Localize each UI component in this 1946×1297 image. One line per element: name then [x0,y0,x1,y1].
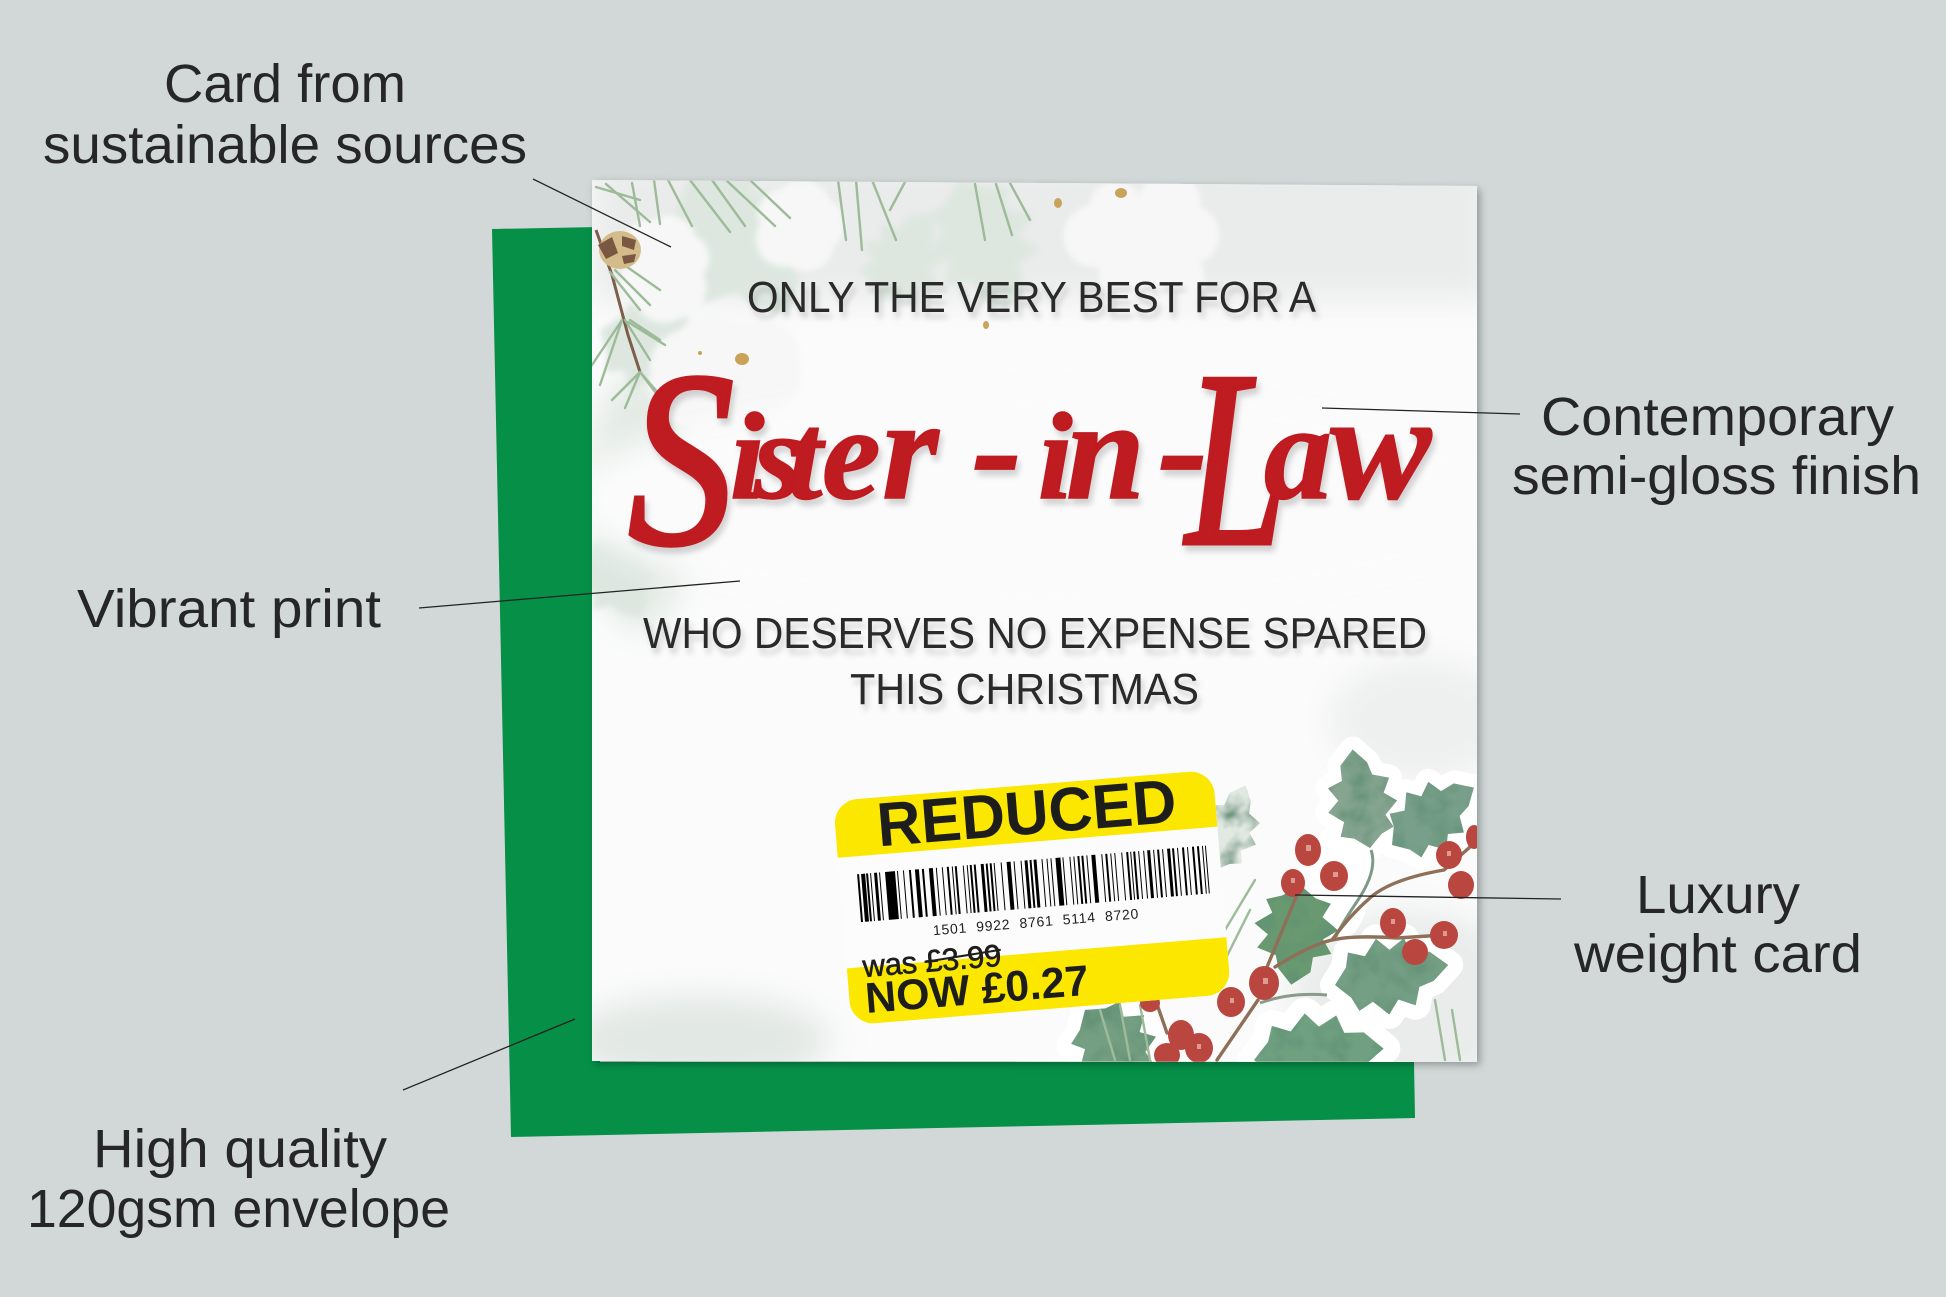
callout: semi-gloss finish: Contemporary [1541,387,1894,447]
callout: semi-gloss finish: semi-gloss finish [1512,446,1921,506]
callout: luxury weight card [1295,865,1862,984]
reduced price sticker [833,764,1231,1025]
callout: vibrant print: Vibrant print [77,579,381,639]
sticker heading: REDUCED [874,767,1179,860]
script title: - [972,365,1022,531]
callout: vibrant print [77,579,740,639]
holly stems [1158,847,1470,1060]
script title: a [1264,378,1332,528]
script title: n [1066,371,1145,529]
script title: - [1158,365,1208,531]
holly berries [1140,825,1482,1067]
script title: e [822,380,881,527]
script title: ist [730,388,826,525]
script title: w [1330,363,1432,531]
callout: envelope: High quality [93,1119,387,1179]
now price: NOW £0.27 [863,957,1091,1023]
watercolour wash: top and sides [592,180,1477,1062]
envelope [492,227,1415,1137]
subheading line 1: WHO DESERVES NO EXPENSE SPARED [643,609,1427,658]
pine needles near holly [1100,880,1460,1060]
script title: r [882,370,940,530]
script title: L [1184,321,1286,598]
gold flecks [698,188,1127,393]
holly halos [1053,743,1494,1114]
callout: luxury weight card: Luxury [1636,865,1800,925]
callout: envelope [27,1019,575,1239]
callout: semi-gloss finish [1322,387,1921,506]
callout: sustainable sources: sustainable sources [43,115,527,175]
barcode [859,870,1208,898]
script title: S [628,321,734,598]
was price: was £3.99 [860,938,1003,984]
icon: pine cone [598,231,641,269]
heading: only the very best: ONLY THE VERY BEST FOR A [747,273,1317,322]
script title [628,321,1432,598]
card [591,179,1484,1069]
pine sprigs [592,180,1030,408]
holly leaves [1071,750,1474,1062]
subheading line 2: THIS CHRISTMAS [850,665,1199,714]
callout: luxury weight card: weight card [1573,924,1862,984]
barcode number: 1501 9922 8761 5114 8720 [932,905,1139,938]
callout: envelope: 120gsm envelope [27,1179,450,1239]
callout: sustainable sources: Card from [164,54,406,114]
script title: i [1038,388,1072,525]
callout: sustainable sources [43,54,671,247]
